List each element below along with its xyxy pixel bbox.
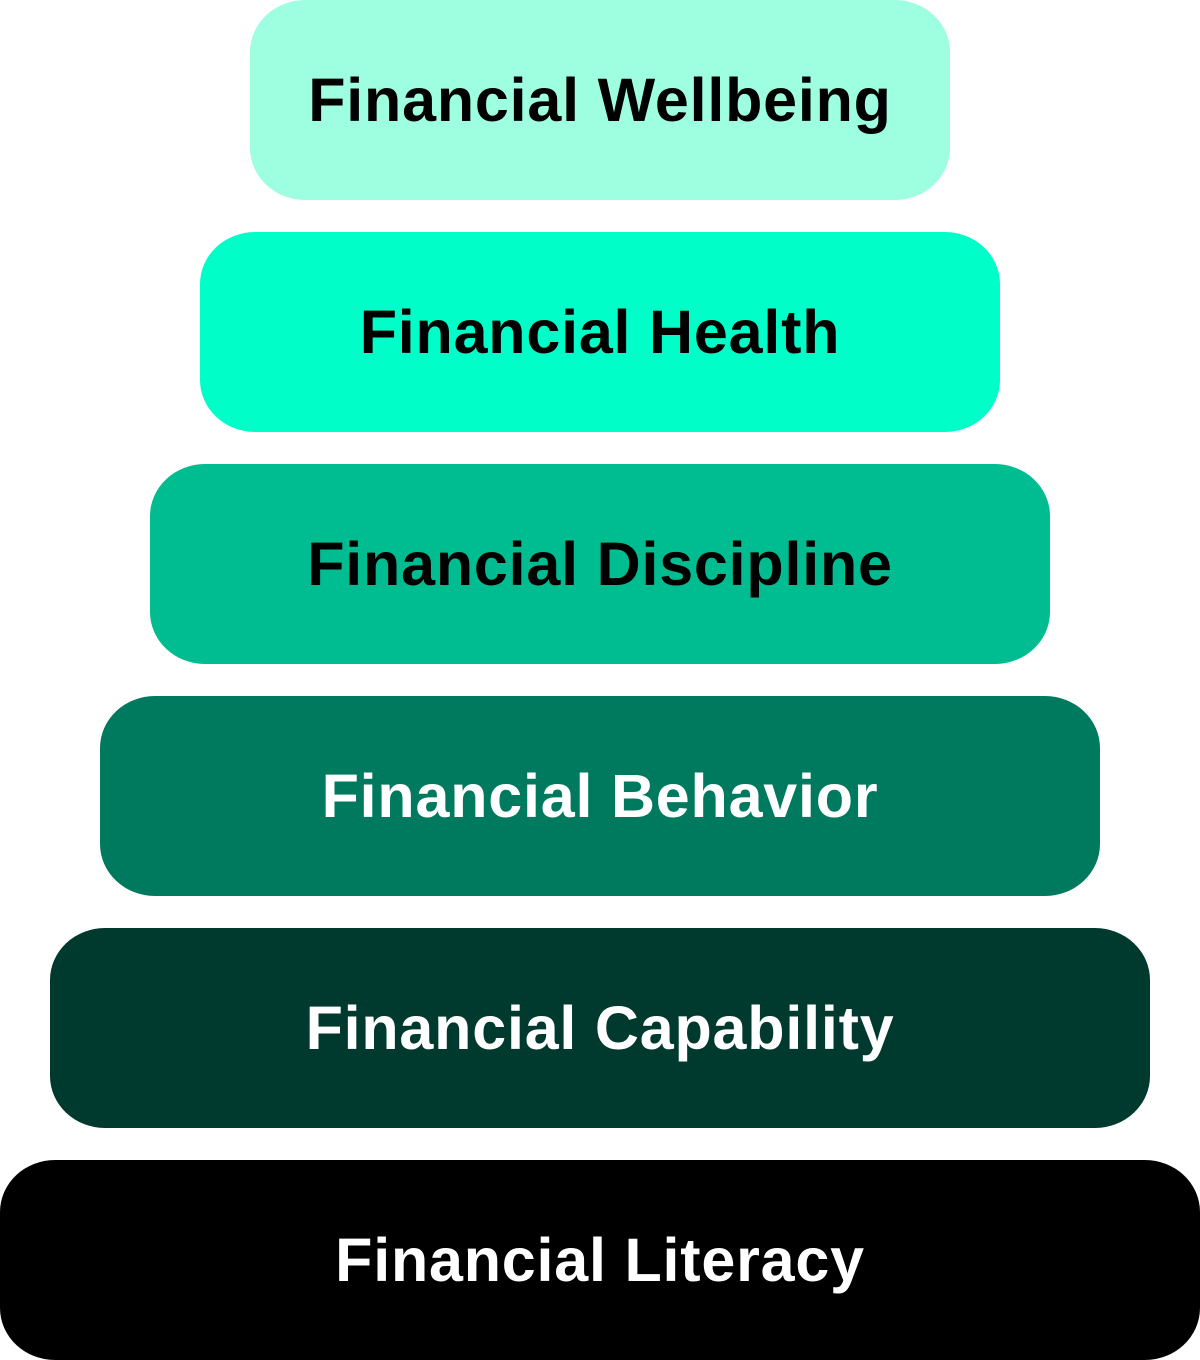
layer: Financial Discipline [150, 464, 1050, 664]
layer: Financial Literacy [0, 1160, 1200, 1360]
layer: Financial Capability: Financial Capability [306, 994, 894, 1062]
layer: Financial Capability [50, 928, 1150, 1128]
layer: Financial Health: Financial Health [360, 298, 840, 366]
layer: Financial Behavior [100, 696, 1100, 896]
layer: Financial Health [200, 232, 1000, 432]
layer: Financial Literacy: Financial Literacy [335, 1226, 865, 1294]
layer: Financial Wellbeing [250, 0, 950, 200]
layer: Financial Behavior: Financial Behavior [322, 762, 878, 830]
layer: Financial Discipline: Financial Discipline [307, 530, 893, 598]
layer: Financial Wellbeing: Financial Wellbeing [308, 66, 892, 134]
